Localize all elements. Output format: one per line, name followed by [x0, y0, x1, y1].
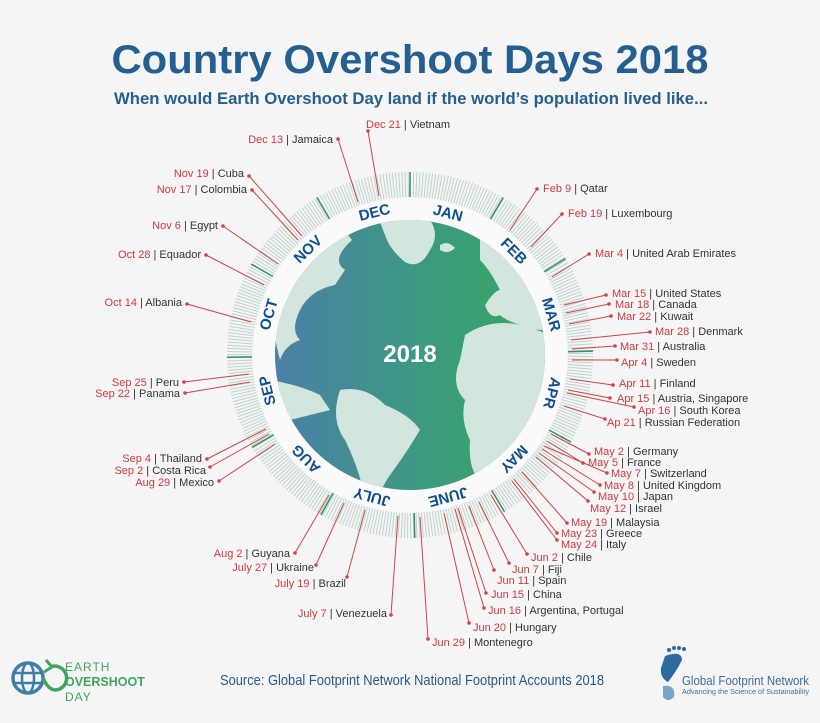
leader dots: [182, 129, 652, 641]
globe year: 2018: [383, 341, 437, 368]
month labels: MAY: [496, 441, 531, 476]
month labels: NOV: [291, 232, 326, 267]
labels left side: Dec 13 | Jamaica: [248, 134, 334, 146]
labels right side: May 24 | Italy: [561, 539, 627, 551]
labels right side: May 19 | Malaysia: [571, 517, 660, 529]
month labels: OCT: [257, 297, 282, 332]
labels right side: Jun 2 | Chile: [531, 552, 592, 564]
labels right side: Mar 15 | United States: [612, 288, 722, 300]
subtitle: When would Earth Overshoot Day land if the world’s population lived like...: [114, 89, 708, 108]
labels left side: Sep 4 | Thailand: [122, 453, 202, 465]
labels right side: May 8 | United Kingdom: [604, 480, 721, 492]
logo: Global Footprint Network: Advancing the Science of Sustainability: [682, 689, 810, 696]
month labels: MAR: [538, 296, 564, 334]
tick ring: [227, 172, 593, 538]
labels left side: Aug 2 | Guyana: [214, 548, 291, 560]
labels right side: Jun 11 | Spain: [497, 575, 566, 587]
labels right side: May 7 | Switzerland: [611, 468, 707, 480]
labels right side: Mar 28 | Denmark: [655, 326, 743, 338]
month labels: JAN: [431, 201, 465, 226]
labels right side: May 2 | Germany: [594, 446, 679, 458]
logo: Global Footprint Network: Global Footprint Network: [682, 674, 810, 688]
labels right side: Apr 11 | Finland: [619, 378, 696, 390]
labels right side: Jun 15 | China: [491, 589, 563, 601]
month labels: DEC: [357, 201, 392, 225]
logo: Global Footprint Network: [661, 646, 810, 700]
month labels: SEP: [256, 374, 280, 407]
label: Vietnam: Dec 21 | Vietnam: [366, 119, 450, 131]
labels right side: Jun 29 | Montenegro: [432, 637, 533, 649]
logo: Earth Overshoot Day: EARTH: [65, 660, 110, 674]
labels right side: May 23 | Greece: [561, 528, 642, 540]
labels left side: Sep 2 | Costa Rica: [114, 465, 207, 477]
month labels: APR: [539, 375, 564, 411]
logo: Earth Overshoot Day: OVERSHOOT: [65, 675, 145, 689]
labels right side: Mar 18 | Canada: [615, 299, 698, 311]
labels right side: [432, 183, 748, 649]
labels left side: [95, 134, 388, 620]
logo: Earth Overshoot Day: DAY: [65, 690, 92, 704]
globe: [275, 220, 545, 490]
labels right side: Apr 4 | Sweden: [621, 357, 696, 369]
labels right side: Jun 16 | Argentina, Portugal: [488, 605, 624, 617]
labels left side: Nov 6 | Egypt: [152, 220, 218, 232]
labels right side: Jun 7 | Fiji: [512, 564, 562, 576]
month labels: AUG: [289, 441, 324, 476]
labels right side: May 10 | Japan: [598, 491, 673, 503]
month labels: [256, 201, 564, 510]
labels right side: Feb 9 | Qatar: [543, 183, 608, 195]
source text: Source: Global Footprint Network National Footprint Accounts 2018: [220, 673, 604, 689]
title: Country Overshoot Days 2018: [112, 38, 708, 82]
labels left side: July 19 | Brazil: [275, 578, 346, 590]
labels left side: July 7 | Venezuela: [298, 608, 388, 620]
labels left side: Oct 28 | Equador: [118, 249, 201, 261]
labels left side: Nov 19 | Cuba: [174, 168, 245, 180]
labels right side: Apr 16 | South Korea: [638, 405, 741, 417]
month labels: JUNE: [426, 483, 469, 510]
labels right side: Apr 15 | Austria, Singapore: [617, 393, 748, 405]
labels right side: Mar 4 | United Arab Emirates: [595, 248, 737, 260]
labels right side: Mar 31 | Australia: [620, 341, 706, 353]
labels right side: Feb 19 | Luxembourg: [568, 208, 672, 220]
labels left side: Oct 14 | Albania: [105, 297, 183, 309]
logo: Earth Overshoot Day: [13, 660, 145, 704]
leader lines: [184, 131, 650, 639]
labels right side: Jun 20 | Hungary: [473, 622, 557, 634]
month labels: FEB: [497, 235, 530, 268]
labels right side: Ap 21 | Russian Federation: [607, 417, 740, 429]
labels right side: May 12 | Israel: [590, 503, 662, 515]
labels left side: Sep 22 | Panama: [95, 388, 181, 400]
labels left side: Sep 25 | Peru: [112, 377, 179, 389]
labels left side: July 27 | Ukraine: [232, 562, 314, 574]
labels left side: Aug 29 | Mexico: [135, 477, 214, 489]
month labels: JULY: [352, 484, 392, 510]
labels right side: Mar 22 | Kuwait: [617, 311, 693, 323]
labels right side: May 5 | France: [588, 457, 661, 469]
labels left side: Nov 17 | Colombia: [157, 184, 248, 196]
